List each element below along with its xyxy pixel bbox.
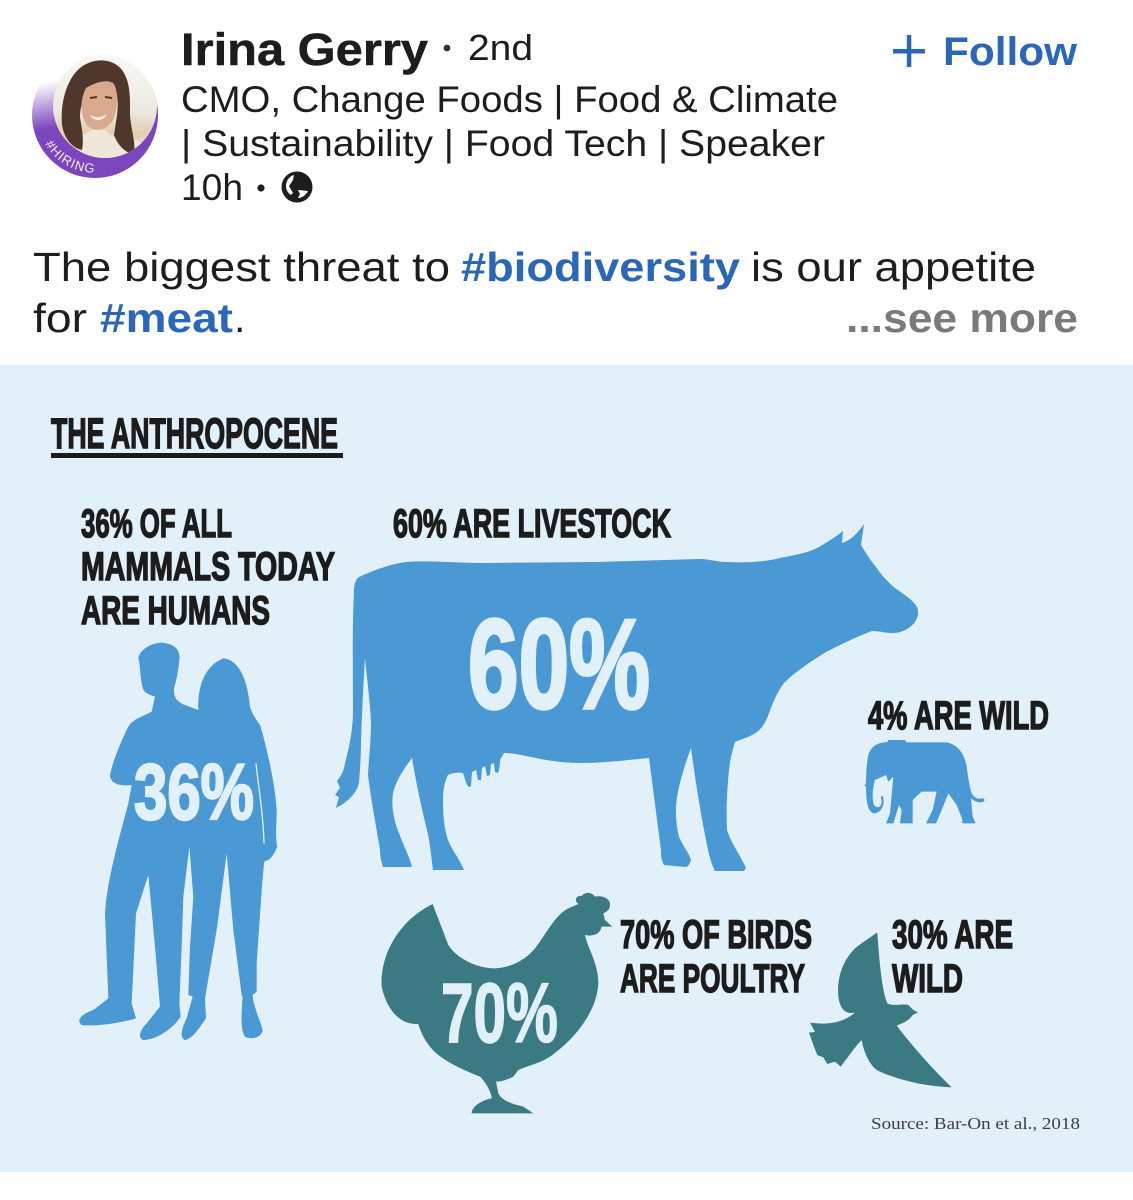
title — [51, 410, 343, 458]
post text: #meat — [100, 295, 233, 341]
avatar badge text: #HIRING — [45, 140, 94, 172]
author headline: CMO, Change Foods | Food & Climate — [181, 79, 838, 120]
cow percentage: 60% — [468, 593, 650, 735]
post text — [33, 244, 1036, 341]
humans label: ARE HUMANS — [81, 589, 270, 633]
wild birds label: 30% ARE — [892, 913, 1013, 957]
human percentage: 36% — [134, 747, 254, 836]
author headline: | Sustainability | Food Tech | Speaker — [181, 123, 825, 164]
icon: chicken silhouette — [382, 893, 612, 1113]
icon: cow silhouette — [335, 524, 918, 871]
follow button: Follow — [943, 30, 1078, 74]
post time: 10h — [181, 167, 243, 208]
follow button — [893, 30, 1078, 74]
chicken percentage: 70% — [441, 966, 558, 1060]
wild birds label — [892, 913, 1013, 1001]
avatar — [32, 54, 158, 178]
humans label: 36% OF ALL — [81, 502, 232, 546]
humans label: MAMMALS TODAY — [81, 545, 335, 589]
poultry label: ARE POULTRY — [620, 957, 805, 1001]
poultry label: 70% OF BIRDS — [620, 913, 812, 957]
title: THE ANTHROPOCENE — [51, 410, 338, 458]
humans label — [81, 502, 335, 633]
source note: Source: Bar-On et al., 2018 — [871, 1114, 1080, 1133]
connection degree: 2nd — [468, 27, 533, 68]
post text: #biodiversity — [461, 244, 740, 290]
icon: globe — [282, 172, 312, 202]
icon: elephant silhouette — [864, 740, 984, 823]
elephant label: 4% ARE WILD — [868, 694, 1049, 738]
livestock label: 60% ARE LIVESTOCK — [393, 502, 671, 546]
connection degree — [444, 27, 533, 68]
poultry label — [620, 913, 812, 1001]
post text: for — [33, 295, 87, 341]
see more link: ...see more — [846, 295, 1078, 341]
icon: wild bird silhouette — [809, 933, 952, 1087]
post text: . — [234, 295, 245, 341]
author name: Irina Gerry — [181, 24, 428, 75]
post text: The biggest threat to — [33, 244, 450, 290]
wild birds label: WILD — [892, 957, 963, 1001]
panel: infographic — [0, 365, 1133, 1172]
post text: is our appetite — [751, 244, 1036, 290]
icon: human couple silhouette — [79, 643, 277, 1040]
author headline — [181, 79, 838, 164]
